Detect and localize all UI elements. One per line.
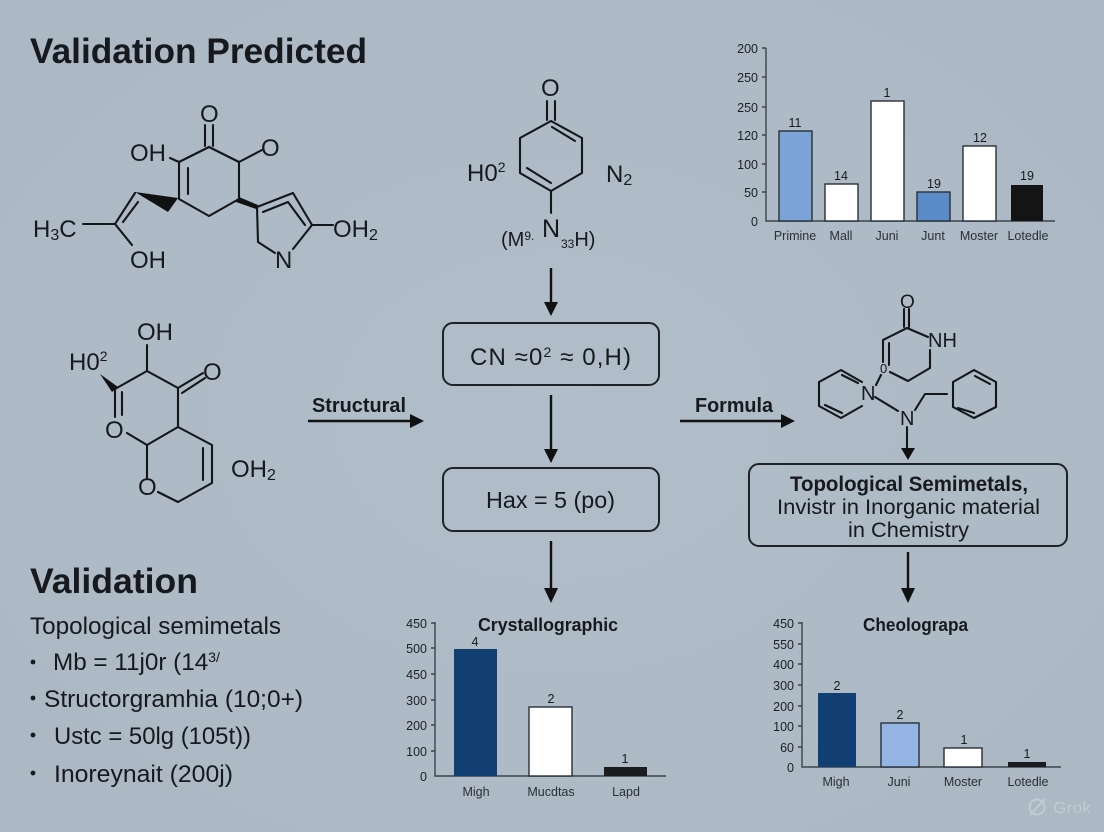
bar chart: Crystallographic [406, 615, 666, 799]
molecule: right structure: O [900, 292, 915, 313]
molecule: top left structure [33, 101, 378, 274]
box: formula: CN ≈0 [470, 344, 542, 371]
bar chart: top right: 14 [834, 169, 848, 183]
bar chart: Cheolograpa [773, 615, 1061, 789]
arrow: Structural [308, 395, 424, 428]
bar chart: Crystallographic: Migh [462, 785, 490, 799]
molecule: top left structure: 3 [50, 227, 59, 244]
bar chart: Crystallographic: Lapd [612, 785, 640, 799]
arrow: Structural: Structural [312, 395, 406, 417]
molecule: top left structure: O [261, 135, 280, 162]
watermark: Grok: Grok [1053, 800, 1092, 817]
bar chart: Cheolograpa: 2 [897, 708, 904, 722]
molecule: top left structure: OH [130, 247, 166, 274]
bar chart: Crystallographic: Crystallographic [478, 615, 618, 635]
arrow: second box to chart [544, 541, 558, 603]
molecule: center left structure: O [138, 474, 157, 501]
bar chart: top right: Mall [830, 229, 852, 243]
bar chart: Crystallographic: 450 [406, 668, 427, 682]
bar chart: top right: 120 [737, 129, 758, 143]
bar chart: Cheolograpa: 2 [834, 679, 841, 693]
box: formula: ≈ 0,H) [552, 344, 631, 371]
molecule: center left structure: 2 [267, 467, 276, 484]
molecule: right structure: N [900, 408, 914, 430]
bar chart: top right: Juni [876, 229, 898, 243]
molecule: right structure: N [861, 383, 875, 405]
bar chart: Crystallographic: Mucdtas [527, 785, 575, 799]
text block: validation list: 3/ [208, 649, 220, 665]
bar chart: Cheolograpa: Migh [822, 775, 850, 789]
bar chart: Cheolograpa: 450 [773, 617, 794, 631]
bar chart: Cheolograpa: 400 [773, 658, 794, 672]
bar chart: top right: Primine [774, 229, 816, 243]
molecule: top center structure: 33 [561, 237, 575, 251]
text block: validation list: Ustc = 50lg (105t)) [54, 723, 251, 750]
text block: validation list: Mb = 11j0r (14 [53, 649, 207, 676]
arrow: Formula: Formula [695, 395, 774, 417]
molecule: top center structure: 9. [524, 229, 534, 243]
molecule: center left structure: OH [137, 319, 173, 346]
molecule: top center structure: 2 [623, 172, 632, 189]
molecule: top left structure: OH [130, 140, 166, 167]
molecule: top left structure: 2 [369, 227, 378, 244]
molecule: top left structure: C [59, 216, 77, 243]
box: formula: 2 [543, 344, 551, 360]
text block: validation list: Structorgramhia (10;0+) [44, 686, 303, 713]
molecule: top center structure: O [541, 75, 560, 102]
text block: validation list: Inoreynait (200j) [54, 761, 233, 788]
bar chart: Cheolograpa: Lotedle [1007, 775, 1049, 789]
bar chart: Cheolograpa: Juni [888, 775, 910, 789]
bar chart: Crystallographic: 100 [406, 745, 427, 759]
molecule: right structure: 0 [880, 361, 887, 376]
bar chart: top right: 250 [737, 101, 758, 115]
molecule: center left structure: O [203, 359, 222, 386]
bar chart: Cheolograpa: 550 [773, 638, 794, 652]
arrow: first box to second box [544, 395, 558, 463]
bar chart: top right: 0 [751, 215, 758, 229]
molecule: top center structure [467, 75, 632, 251]
bar chart: top right: 250 [737, 71, 758, 85]
bar chart: top right: 19 [927, 177, 941, 191]
bar chart: Cheolograpa: Moster [944, 775, 982, 789]
molecule: top center structure: N [606, 161, 623, 188]
bar chart: Cheolograpa: 60 [780, 741, 794, 755]
box: Hax equation [443, 468, 659, 531]
box: topological semimetals: Invistr in Inorganic material [777, 496, 1040, 519]
bar chart: top right: 11 [789, 116, 802, 130]
bar chart: Crystallographic: 300 [406, 694, 427, 708]
bar chart: top right: 12 [973, 131, 987, 145]
molecule: top center structure: 2 [498, 159, 506, 175]
molecule: right structure: NH [928, 330, 957, 352]
molecule: top left structure: N [275, 247, 292, 274]
arrow: top molecule to first box [544, 268, 558, 316]
bar chart: top right: 200 [737, 42, 758, 56]
bar chart: Crystallographic: 200 [406, 719, 427, 733]
bar chart: top right: Moster [960, 229, 998, 243]
bar chart: Crystallographic: 4 [472, 635, 479, 649]
molecule: top center structure: H) [574, 229, 595, 251]
molecule: right structure [819, 292, 996, 460]
text block: validation list: Topological semimetals [30, 613, 281, 640]
molecule: top center structure: (M [501, 229, 524, 251]
bar chart: Cheolograpa: 0 [787, 761, 794, 775]
bar chart: Cheolograpa: 1 [1024, 747, 1031, 761]
molecule: center left structure [69, 319, 276, 502]
molecule: center left structure: H0 [69, 349, 100, 376]
bar chart: Cheolograpa: 200 [773, 700, 794, 714]
box: topological semimetals: in Chemistry [848, 519, 970, 542]
heading: Validation: Validation [30, 562, 198, 601]
bar chart: top right: 50 [744, 186, 758, 200]
box: topological semimetals: Topological Semimetals, [790, 473, 1028, 496]
arrow: box to right chart [901, 552, 915, 603]
bar chart: top right: 19 [1020, 169, 1034, 183]
molecule: center left structure: 2 [100, 348, 108, 364]
bar chart: Cheolograpa: 300 [773, 679, 794, 693]
bar chart: Crystallographic: 450 [406, 617, 427, 631]
bar chart: top right [737, 42, 1055, 243]
title: Validation Predicted: Validation Predicted [30, 32, 367, 71]
bar chart: top right: Junt [921, 229, 945, 243]
molecule: top center structure: H0 [467, 160, 498, 187]
box: Hax equation: Hax = 5 (po) [486, 487, 615, 513]
watermark: Grok [1030, 799, 1092, 817]
bar chart: Crystallographic: 2 [548, 692, 555, 706]
bar chart: Crystallographic: 1 [622, 752, 629, 766]
bar chart: top right: 100 [737, 158, 758, 172]
bar chart: top right: 1 [884, 86, 891, 100]
molecule: top left structure: O [200, 101, 219, 128]
molecule: center left structure: O [105, 417, 124, 444]
bar chart: Crystallographic: 0 [420, 770, 427, 784]
bar chart: Cheolograpa: Cheolograpa [863, 615, 969, 635]
molecule: center left structure: OH [231, 456, 267, 483]
molecule: top left structure: OH [333, 216, 369, 243]
molecule: top center structure: N [542, 215, 560, 243]
bar chart: top right: Lotedle [1007, 229, 1049, 243]
box: formula [443, 323, 659, 385]
bar chart: Crystallographic: 500 [406, 642, 427, 656]
arrow: Formula [680, 395, 795, 428]
text block: validation list [30, 613, 303, 788]
box: topological semimetals [749, 464, 1067, 546]
molecule: top left structure: H [33, 216, 50, 243]
bar chart: Cheolograpa: 100 [773, 720, 794, 734]
bar chart: Cheolograpa: 1 [961, 733, 968, 747]
